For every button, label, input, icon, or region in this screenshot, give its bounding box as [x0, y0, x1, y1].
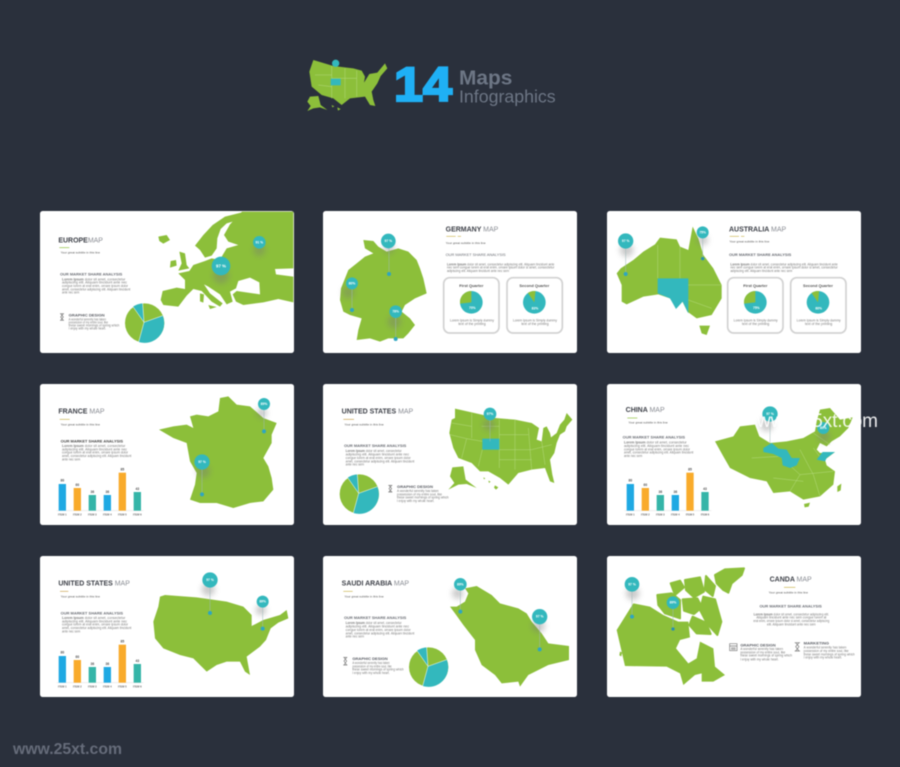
bar chart: 36 [658, 490, 662, 494]
pin: 97%: 97 % [216, 263, 226, 268]
card: second quarter: Second Quarter [519, 283, 550, 288]
pin: 97% [212, 257, 230, 284]
bar chart: 80 [628, 479, 632, 483]
icon: hourglass [60, 314, 64, 320]
body text: amet, consectetur adipiscing elit. Aliquam tincidunt [62, 626, 131, 630]
section heading: OUR MARKET SHARE ANALYSIS [759, 604, 822, 608]
body text: adipiscing elit. Aliquam tincidunt ante nec sem [447, 269, 509, 273]
panel: Saudi Arabia map [323, 556, 577, 697]
body text [624, 441, 693, 458]
graphic design text: I enjoy with my whole heart. [397, 499, 434, 503]
body text: erat enim, ornare ipsum dolor si amet, consectetur adipiscing [753, 619, 830, 623]
map: USA [153, 595, 288, 675]
graphic design text [352, 661, 404, 675]
section heading: OUR MARKET SHARE ANALYSIS [61, 611, 123, 615]
watermark across China panel: www.25xt.com [756, 411, 878, 432]
body text: amet, consectetur adipiscing elit. Aliquam tincidunt [346, 459, 414, 463]
pin: 89% [256, 596, 269, 631]
bar chart: 60 [75, 655, 79, 659]
body text: Lorem Ipsum dolor sit amet, consectetur adipiscing elit. Aliquam tincidunt ante [730, 262, 838, 266]
body text: ante nec sem [62, 291, 80, 295]
subtitle: Your great subtitle in this line [729, 240, 770, 244]
pin: 89%: 89% [457, 582, 464, 586]
graphic design text: I enjoy with my whole heart. [352, 671, 390, 675]
bar chart: 43 [135, 659, 139, 663]
body text: adipiscing elit. Aliquam tincidunt ante nec [346, 452, 409, 456]
bar chart [57, 468, 143, 517]
body text: ante nec sem [62, 457, 81, 461]
pin: 78%: 78% [392, 310, 399, 314]
bar chart [625, 468, 711, 517]
body text [62, 444, 131, 461]
body text: adipiscing elit. Aliquam tincidunt ante nec [62, 281, 127, 285]
accent line [343, 590, 353, 592]
card: second quarter [791, 278, 846, 333]
pin: 80%: 80% [349, 281, 355, 285]
card: second quarter: Lorem Ipsum is Simply dummy [797, 319, 841, 323]
subtitle: Your great subtitle in this line [446, 241, 486, 245]
subtitle: Your great subtitle in this line [628, 421, 668, 425]
graphic design text [69, 317, 120, 330]
graphic design text: these sweet mornings of spring which [352, 668, 404, 672]
bar chart: ITEM 4 [103, 685, 112, 689]
bar chart: ITEM 4 [671, 513, 680, 517]
body text [62, 616, 131, 633]
bar chart: 85 [120, 640, 124, 644]
bar chart: 85 [120, 468, 124, 472]
bar chart: ITEM 2 [641, 513, 650, 517]
graphic design text: these sweet mornings of spring which [397, 496, 449, 500]
pin: 97%: 97 % [628, 582, 636, 586]
card: first quarter: text of the printing [458, 322, 486, 326]
bar chart: ITEM 5 [118, 685, 127, 689]
card: first quarter [728, 278, 783, 333]
map: Canada [617, 568, 744, 685]
body text [62, 277, 130, 295]
body text: Lorem Ipsum dolor sit amet, consectetur [346, 621, 402, 625]
accent line [343, 418, 354, 420]
bar chart: 43 [703, 487, 707, 491]
body text: Lorem Ipsum dolor sit amet, consectetur adipiscing elit. Aliquam tincidunt ante [447, 262, 555, 266]
card: first quarter: First Quarter [459, 283, 484, 288]
accent line [60, 590, 68, 592]
graphic design text [397, 489, 449, 503]
graphic design text: possession of my entire soul, like [740, 650, 786, 654]
pin: 89% [452, 578, 467, 614]
title: FRANCE MAP [58, 409, 105, 416]
body text: amet, consectetur adipiscing elit. Aliquam tincidunt [624, 451, 693, 455]
map: USA states [448, 409, 572, 490]
card: second quarter: text of the printing [521, 322, 549, 326]
panel: Germany map [323, 211, 577, 353]
bar chart: ITEM 2 [73, 513, 82, 517]
panel: France map [40, 384, 294, 525]
bar chart: 60 [643, 483, 647, 487]
body text: Lorem Ipsum dolor sit amet, consectetur [62, 277, 125, 281]
bar chart: ITEM 1 [58, 513, 67, 517]
body text: amet, consectetur adipiscing elit. Aliquam tincidunt [62, 287, 130, 291]
body text [346, 449, 414, 467]
body text: ante nec sem [346, 463, 364, 467]
bar chart: 36 [90, 662, 94, 666]
graphic design text: these sweet mornings of spring which [69, 323, 120, 327]
big number 14: 14 [394, 58, 452, 112]
section heading: OUR MARKET SHARE ANALYSIS [729, 253, 792, 257]
body text: congue lorem at erat enim, ornare ipsum dolor [346, 628, 411, 632]
panel: United States map with states [323, 384, 577, 525]
bar chart: ITEM 5 [118, 513, 127, 517]
body text: Lorem Ipsum dolor sit amet, consectetur [62, 616, 125, 620]
subtitle: Your great subtitle in this line [61, 423, 100, 427]
icon: calendar [730, 644, 737, 651]
graphic design text: I enjoy with my whole heart. [740, 657, 779, 661]
accent line [730, 235, 744, 237]
card: first quarter: Lorem Ipsum is Simply dummy [734, 319, 778, 323]
bar chart [57, 640, 143, 689]
subtitle: Your great subtitle in this line [344, 595, 384, 599]
graphic design text: A wonderful serenity has taken [69, 317, 106, 321]
body text: adipiscing elit. Aliquam tincidunt ante nec [624, 444, 689, 448]
pin: 97%: 97 % [536, 615, 543, 619]
bar chart: 36 [105, 662, 109, 666]
pin: 97%: 97% [487, 412, 493, 416]
pin: 75%: 75% [699, 230, 706, 234]
card: second quarter: 83% [532, 306, 538, 310]
body text: congue lorem at erat enim, ornare ipsum dolor [624, 447, 690, 451]
title: EUROPEMAP [58, 237, 103, 244]
pin: 75% [697, 226, 709, 260]
section heading: OUR MARKET SHARE ANALYSIS [344, 616, 407, 620]
graphic design text: A wonderful serenity has taken [397, 489, 439, 493]
section heading: OUR MARKET SHARE ANALYSIS [344, 444, 407, 448]
map: Australia [617, 227, 722, 335]
card: second quarter: Second Quarter [803, 283, 833, 288]
accent line [59, 247, 69, 249]
pin: 89%: 89% [259, 600, 266, 604]
body text: congue lorem at erat enim, ornare ipsum dolor [62, 623, 128, 627]
footer watermark: www.25xt.com [12, 741, 122, 758]
pin: 91% [253, 236, 266, 256]
title: UNITED STATES MAP [342, 409, 414, 416]
pin: 89% [667, 596, 679, 631]
marketing text: possession of my entire soul, like [804, 649, 849, 653]
bar chart: ITEM 5 [686, 513, 695, 517]
pin: 78% [388, 305, 402, 341]
bar chart: ITEM 3 [88, 513, 97, 517]
bar chart: ITEM 3 [88, 685, 97, 689]
bar chart: ITEM 4 [103, 513, 112, 517]
pin: 97% [194, 454, 210, 496]
bar chart: 80 [60, 479, 64, 483]
graphic design heading: GRAPHIC DESIGN [397, 484, 433, 489]
icon: hourglass [388, 485, 392, 492]
body text: ante nec sem [346, 635, 364, 639]
pin: 89% [256, 398, 270, 433]
graphic design text: these sweet mornings of spring which [740, 654, 792, 658]
subtitle: Your great subtitle in this line [61, 251, 100, 255]
pin: 97%: 97 % [206, 578, 214, 582]
card: first quarter: text of the printing [742, 322, 770, 326]
bar chart: 60 [75, 483, 79, 487]
panel: China map [607, 384, 861, 525]
section heading: OUR MARKET SHARE ANALYSIS [446, 253, 506, 257]
subtitle: Your great subtitle in this line [61, 595, 100, 599]
body text: ante nec sem [624, 454, 643, 458]
marketing text: I enjoy with my whole heart. [804, 656, 842, 660]
body text: Lorem Ipsum dolor sit amet, consectetur [624, 441, 687, 445]
subtitle: Your great subtitle in this line [344, 423, 384, 427]
bar chart: 36 [105, 490, 109, 494]
card: second quarter: text of the printing [805, 322, 833, 326]
map: Saudi Arabia [450, 586, 569, 687]
graphic design heading: GRAPHIC DESIGN [69, 313, 105, 318]
graphic design heading: GRAPHIC DESIGN [352, 656, 388, 661]
bar chart: 43 [135, 487, 139, 491]
pin: 97% [532, 609, 547, 651]
pie chart [340, 474, 379, 514]
bar chart: 36 [90, 490, 94, 494]
title: GERMANY MAP [446, 226, 499, 233]
bar chart: ITEM 3 [656, 513, 665, 517]
pin: 91%: 91 % [256, 240, 263, 244]
pin: 97% [483, 408, 496, 441]
bar chart: 36 [673, 490, 677, 494]
panel: United States map silhouette [40, 556, 294, 697]
body text: elit. Aliquam tincidunt ante nec sem [767, 623, 816, 627]
panel: Canada map [607, 556, 861, 697]
pin: 97%: 97 % [622, 239, 629, 243]
body text: nec sem congue lorem at erat enim, ornare ipsum dolor si amet, consectetur [447, 266, 554, 270]
graphic design text: A wonderful serenity has taken [352, 661, 390, 665]
body text: adipiscing elit. Aliquam tincidunt ante nec sem [730, 269, 793, 273]
bar chart: ITEM 6 [133, 513, 142, 517]
pin: 97% [618, 233, 633, 276]
body text: congue lorem at erat enim, ornare ipsum dolor [62, 451, 128, 455]
map: Europe [158, 212, 293, 309]
subtitle: Your great subtitle in this line [769, 590, 808, 594]
body text: ante nec sem [62, 629, 81, 633]
map: Germany [340, 240, 427, 342]
heading Maps: Maps [459, 66, 512, 89]
body text: amet, consectetur adipiscing elit. Aliquam tincidunt [346, 631, 414, 635]
body text [447, 262, 555, 273]
bar chart: ITEM 6 [133, 685, 142, 689]
body text [346, 621, 414, 639]
title: UNITED STATES MAP [58, 581, 130, 588]
body text: adipiscing elit. Aliquam tincidunt ante nec [62, 619, 127, 623]
pin: 89% [817, 422, 830, 442]
body text: adipiscing elit. Aliquam tincidunt ante nec [62, 447, 127, 451]
icon: hourglass [343, 657, 347, 665]
body text [730, 262, 838, 273]
body text: congue lorem at erat enim, ornare ipsum dolor [346, 456, 411, 460]
pin: 97% [760, 406, 778, 443]
graphic design text [740, 647, 792, 661]
title: CANDA MAP [770, 577, 812, 584]
accent line [60, 418, 70, 420]
card: second quarter: Lorem Ipsum is Simply dummy [513, 319, 557, 323]
card: first quarter: Lorem Ipsum is Simply dummy [450, 319, 494, 323]
bar chart: ITEM 1 [626, 513, 635, 517]
graphic design text: possession of my entire soul, like [69, 320, 108, 324]
title: AUSTRALIA MAP [729, 226, 787, 233]
title: CHINA MAP [626, 407, 665, 414]
body text: adipiscing elit. Aliquam tincidunt ante nec [346, 624, 409, 628]
title: SAUDI ARABIA MAP [342, 581, 409, 588]
graphic design text: possession of my entire soul, like [352, 664, 392, 668]
pie chart [125, 303, 164, 343]
header: 14 Maps Infographics [307, 58, 556, 112]
pin: 80% [342, 277, 358, 312]
accent line [627, 417, 637, 419]
pin: 97% [381, 234, 396, 276]
body text: nec sem congue lorem at erat enim, ornare ipsum dolor si amet, consectetur [730, 266, 838, 270]
graphic design text: A wonderful serenity has taken [740, 647, 783, 651]
pin: 89%: 89% [670, 601, 676, 605]
bar chart: 80 [60, 651, 64, 655]
card: first quarter: 70% [469, 306, 476, 310]
marketing text: these sweet mornings of spring which [804, 652, 855, 656]
pin: 97% [625, 577, 639, 619]
map: France [159, 396, 277, 508]
pie chart [409, 647, 448, 687]
pin: 97%: 97 % [198, 460, 206, 464]
pin: 89%: 89% [261, 402, 267, 406]
body text: Aliquam tincidunt ante nec sem congue lorem at [756, 616, 826, 620]
body text: amet, consectetur adipiscing elit. Aliquam tincidunt [62, 454, 131, 458]
bar chart: ITEM 2 [73, 685, 82, 689]
card: first quarter: First Quarter [743, 283, 768, 288]
card: second quarter: 60% [815, 306, 822, 310]
graphic design heading: GRAPHIC DESIGN [740, 642, 776, 647]
pin: 97% [202, 572, 218, 615]
body text: Lorem Ipsum dolor sit amet, consectetur [62, 444, 125, 448]
card: first quarter: 75% [753, 306, 760, 310]
graphic design text: possession of my entire soul, like [397, 492, 442, 496]
body text [753, 612, 830, 627]
panel: Europe map [40, 211, 294, 353]
marketing heading: MARKETING [804, 641, 829, 646]
bar chart: 85 [688, 468, 692, 472]
marketing text [804, 646, 855, 660]
section heading: OUR MARKET SHARE ANALYSIS [60, 272, 123, 276]
card: first quarter [444, 278, 499, 333]
subheading Infographics: Infographics [459, 87, 556, 107]
bar chart: ITEM 1 [58, 685, 67, 689]
section heading: OUR MARKET SHARE ANALYSIS [623, 436, 685, 440]
card: second quarter [507, 278, 562, 333]
map: China [715, 408, 853, 507]
marketing text: A wonderful serenity has taken [804, 646, 847, 650]
accent line [784, 586, 795, 588]
graphic design text: I enjoy with my whole heart. [69, 326, 106, 330]
pin: 97%: 97 % [385, 239, 392, 243]
pin: 89%: 89% [820, 426, 827, 430]
bar chart: ITEM 6 [701, 513, 710, 517]
body text: Lorem Ipsum dolor sit amet, consectetur [346, 449, 402, 453]
body text: Lorem Ipsum dolor sit amet, consectetur adipiscing elit. [754, 612, 829, 616]
section heading: OUR MARKET SHARE ANALYSIS [61, 439, 123, 443]
icon: hourglass [795, 643, 800, 651]
pin: 97%: 97 % [766, 412, 774, 416]
panel: Australia map [607, 211, 861, 353]
icon: USA map [307, 60, 387, 111]
body text: congue lorem at erat enim, ornare ipsum dolor [62, 284, 128, 288]
accent line [446, 235, 461, 237]
